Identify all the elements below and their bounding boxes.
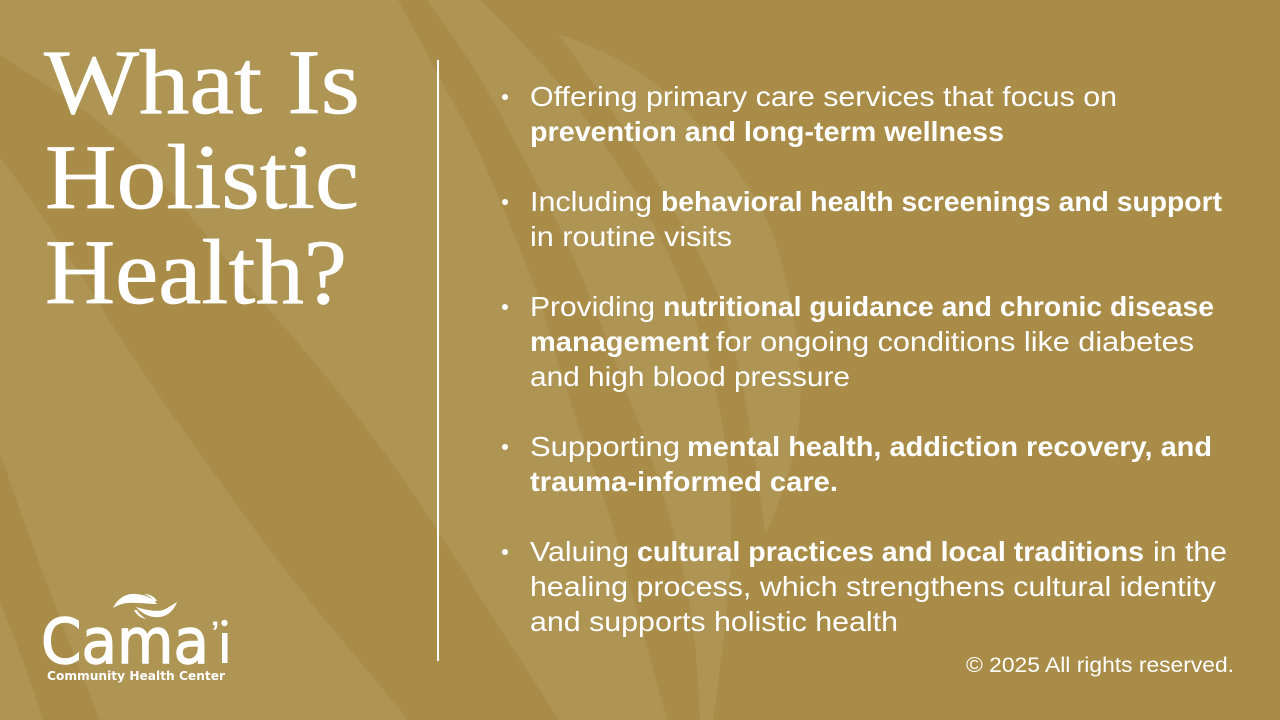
bullet 3: nutrition and chronic disease: Providing xyxy=(530,291,655,322)
bullet 3: nutrition and chronic disease: nutritional guidance and chronic disease xyxy=(663,291,1214,322)
vertical divider xyxy=(437,60,439,661)
background: leaf shapes xyxy=(0,0,801,720)
bullet 5: cultural practices: and supports holistic health xyxy=(530,606,898,637)
bullet 5: cultural practices: in the xyxy=(1153,536,1227,567)
bullet 4: mental health: mental health, addiction recovery, and xyxy=(687,431,1212,462)
bullet 4: mental health: Supporting xyxy=(530,431,680,462)
title: Health? xyxy=(45,221,347,323)
logo: Cama'i Community Health Center xyxy=(41,594,228,683)
wordmark: Cama xyxy=(41,605,209,678)
bullet 2: behavioral health: behavioral health screenings and support xyxy=(661,186,1222,217)
title: Holistic xyxy=(45,126,359,228)
icon: swoosh xyxy=(113,594,177,619)
bullet 5: cultural practices: Valuing xyxy=(530,536,629,567)
bullet 3: nutrition and chronic disease: for ongoing conditions like diabetes xyxy=(716,326,1194,357)
bullet 3: nutrition and chronic disease: and high blood pressure xyxy=(530,361,850,392)
tagline: Community Health Center xyxy=(47,668,226,683)
bullet 3: nutrition and chronic disease: management xyxy=(530,326,709,357)
title xyxy=(44,31,360,323)
bullet list xyxy=(502,81,1227,637)
logo: Cama'i Community Health Center: ’ xyxy=(211,616,219,649)
bullet 4: mental health xyxy=(502,431,1212,497)
bullet 1: primary care: Offering primary care services that focus on xyxy=(530,81,1117,112)
bullet 2: behavioral health: Including xyxy=(530,186,652,217)
bullet 5: cultural practices: healing process, which strengthens cultural identity xyxy=(530,571,1216,602)
bullet 2: behavioral health: in routine visits xyxy=(530,221,732,252)
bullet 5: cultural practices xyxy=(502,536,1227,637)
bullet 1: primary care xyxy=(502,81,1117,147)
bullet 4: mental health: trauma-informed care. xyxy=(530,466,838,497)
copyright note: © 2025 All rights reserved. xyxy=(966,654,1234,677)
bullet 1: primary care: prevention and long-term wellness xyxy=(530,116,1004,147)
title: What Is xyxy=(44,31,360,133)
bullet 2: behavioral health xyxy=(502,186,1222,252)
bullet 5: cultural practices: cultural practices and local traditions xyxy=(637,536,1144,567)
bullet 3: nutrition and chronic disease xyxy=(502,291,1214,392)
